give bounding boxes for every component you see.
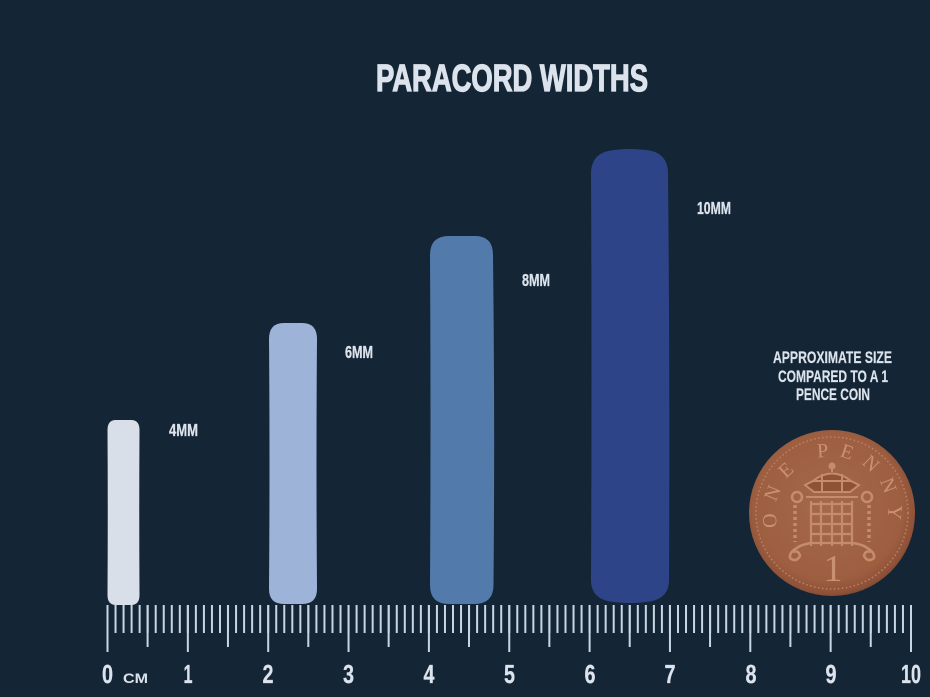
caption: coin comparison: PENCE COIN bbox=[796, 385, 870, 404]
ruler bbox=[106, 619, 912, 628]
bar: 6mm cord bbox=[269, 323, 317, 604]
ruler numbers: 10 bbox=[901, 659, 921, 689]
label: 6mm: 6MM bbox=[345, 342, 373, 362]
label: 10mm: 10MM bbox=[697, 198, 731, 218]
ruler numbers: 5 bbox=[504, 659, 515, 689]
coin value: 1 bbox=[824, 548, 842, 590]
bar: 4mm cord bbox=[108, 420, 140, 605]
ruler numbers: 3 bbox=[343, 659, 354, 689]
ruler numbers: 2 bbox=[262, 659, 274, 689]
ruler numbers: 6 bbox=[584, 659, 596, 689]
crown bbox=[805, 463, 859, 497]
bar: 10mm cord bbox=[591, 149, 669, 603]
caption: coin comparison: COMPARED TO A 1 bbox=[778, 367, 888, 386]
ruler numbers: 0 bbox=[102, 659, 113, 689]
ruler numbers bbox=[102, 659, 921, 689]
label: 4mm: 4MM bbox=[169, 420, 198, 440]
title: PARACORD WIDTHS bbox=[376, 58, 648, 100]
ruler numbers: 8 bbox=[746, 659, 756, 689]
coin lettering: ONE PENNY bbox=[763, 444, 902, 528]
portcullis bbox=[810, 501, 853, 546]
chains bbox=[790, 492, 874, 560]
ruler numbers: 1 bbox=[184, 659, 192, 689]
ruler unit: CM bbox=[123, 670, 148, 686]
ruler numbers: 9 bbox=[826, 659, 836, 689]
bar: 8mm cord bbox=[430, 236, 494, 604]
icon: one penny coin bbox=[749, 430, 915, 596]
ruler numbers: 4 bbox=[424, 659, 435, 689]
caption: coin comparison bbox=[773, 348, 892, 404]
ruler numbers: 7 bbox=[664, 659, 676, 689]
label: 8mm: 8MM bbox=[522, 270, 550, 290]
